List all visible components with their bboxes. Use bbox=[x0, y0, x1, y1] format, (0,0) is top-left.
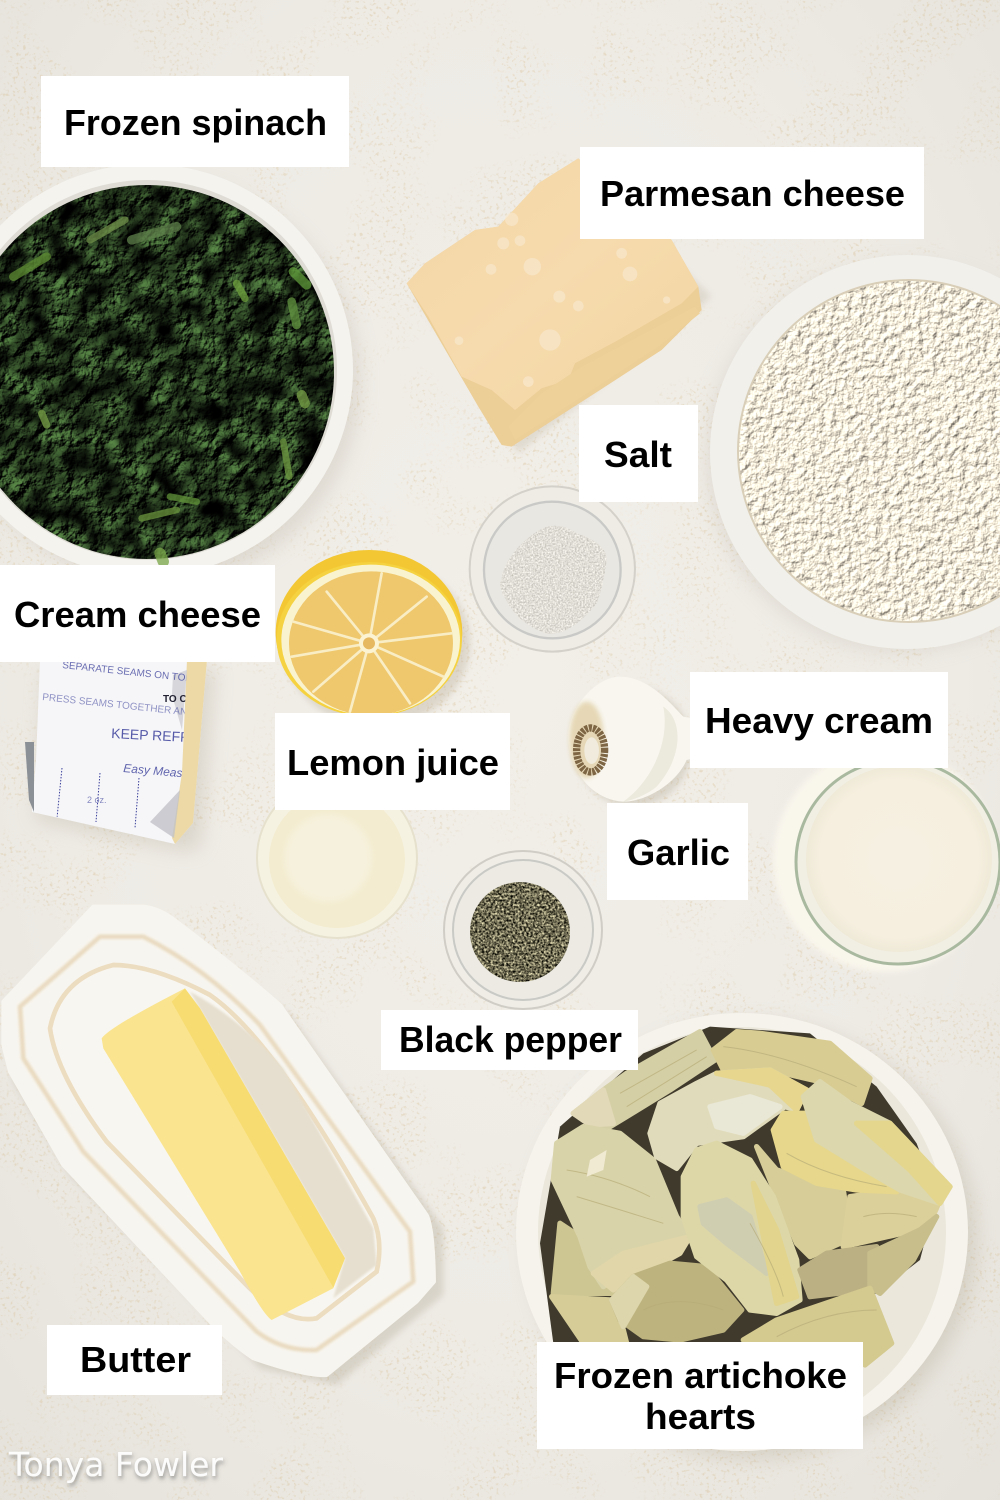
package printing: PRESS SEAMS TOGETHER AND F bbox=[42, 692, 204, 720]
artichoke pieces bbox=[552, 1032, 950, 1365]
watermark: Tonya Fowler: Tonya Fowler bbox=[8, 1445, 223, 1484]
ingredient: salt dish bbox=[470, 486, 635, 652]
artichoke fibre lines bbox=[567, 1047, 917, 1337]
label: Frozen spinach bbox=[41, 76, 349, 167]
ingredient: cream cheese package bbox=[25, 660, 215, 850]
label: Cream cheese bbox=[0, 565, 275, 662]
label: Black pepper bbox=[381, 1010, 638, 1070]
ingredient: lemon half bbox=[276, 550, 470, 727]
ingredient: garlic bulb bbox=[568, 677, 700, 807]
label: Parmesan cheese bbox=[580, 147, 924, 239]
label: Salt bbox=[579, 405, 698, 502]
label: Heavy cream: Heavy cream bbox=[705, 700, 933, 741]
spinach leaf highlights bbox=[13, 220, 307, 562]
label: Salt: Salt bbox=[604, 434, 672, 475]
ingredient: frozen spinach bowl bbox=[0, 164, 360, 584]
ingredient: parmesan wedge bbox=[407, 158, 712, 453]
package printing bbox=[42, 662, 186, 828]
ingredient: black pepper dish bbox=[444, 851, 602, 1009]
lemon membranes bbox=[292, 573, 452, 712]
label: Butter bbox=[47, 1325, 222, 1395]
stick of butter bbox=[102, 988, 345, 1320]
ingredient: grated parmesan bowl bbox=[706, 255, 1000, 652]
label: Butter: Butter bbox=[80, 1339, 191, 1380]
label: Frozen artichoke hearts bbox=[537, 1342, 863, 1449]
ingredient: butter dish with butter bbox=[3, 907, 443, 1385]
label: Parmesan cheese: Parmesan cheese bbox=[600, 173, 905, 214]
label: Frozen spinach: Frozen spinach bbox=[64, 102, 327, 143]
label: Lemon juice: Lemon juice bbox=[287, 742, 499, 783]
package printing: Easy Meas bbox=[123, 761, 183, 780]
label: Cream cheese: Cream cheese bbox=[14, 594, 261, 635]
label: Frozen artichoke hearts: hearts bbox=[645, 1396, 756, 1437]
ingredient: lemon juice dish bbox=[257, 778, 417, 938]
package printing: SEPARATE SEAMS ON TOP C bbox=[62, 660, 202, 686]
label: Heavy cream bbox=[690, 672, 948, 768]
label: Black pepper: Black pepper bbox=[399, 1019, 622, 1060]
ingredient: heavy cream jar bbox=[773, 748, 1000, 972]
ingredient: artichoke hearts bowl bbox=[516, 1013, 976, 1458]
label: Garlic bbox=[607, 803, 748, 900]
label: Lemon juice bbox=[275, 713, 510, 810]
package printing: KEEP REFR bbox=[111, 725, 191, 745]
package printing: TO C bbox=[163, 694, 187, 705]
label: Garlic: Garlic bbox=[627, 832, 730, 873]
label: Frozen artichoke hearts: Frozen artichoke bbox=[554, 1355, 847, 1396]
package printing: 2 oz. bbox=[87, 795, 107, 805]
